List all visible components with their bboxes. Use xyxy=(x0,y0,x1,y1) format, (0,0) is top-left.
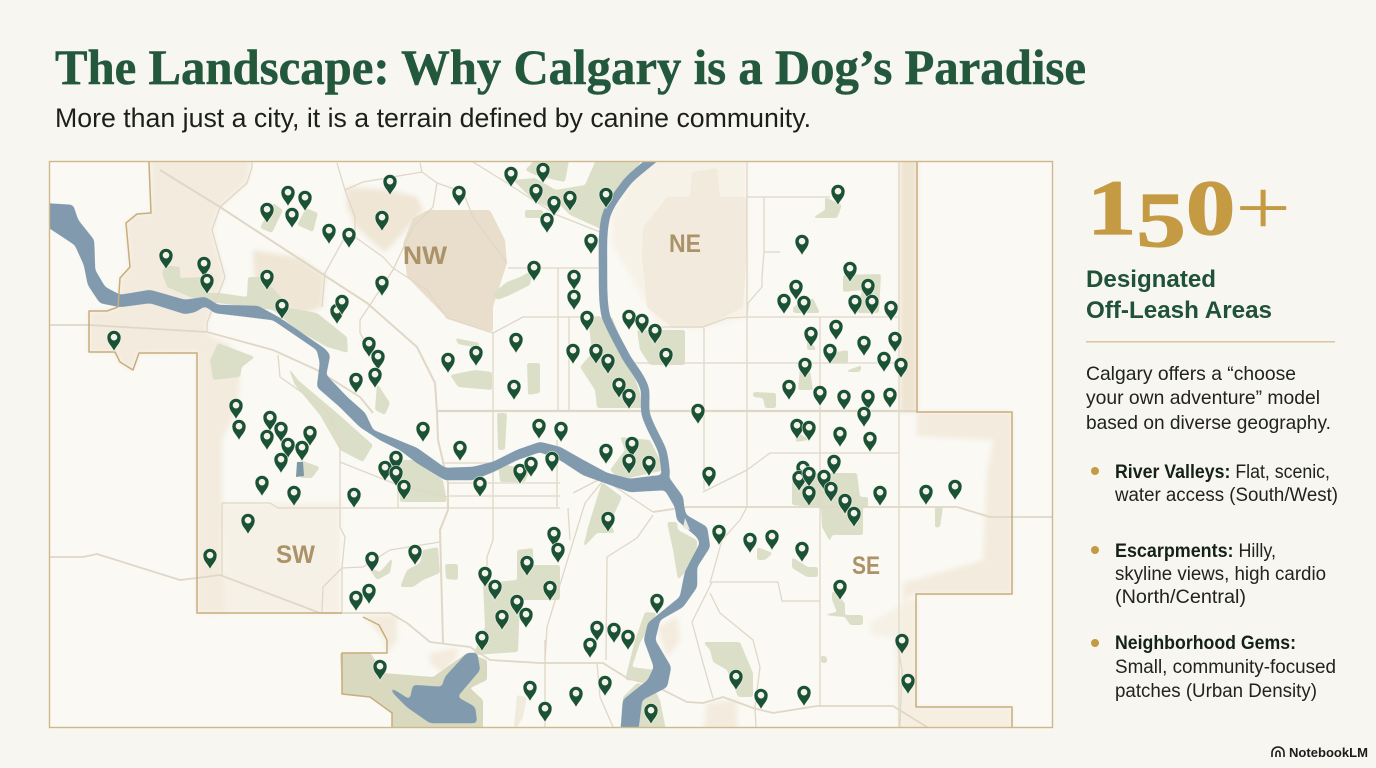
map: city boundary xyxy=(89,162,1012,727)
quadrant label: SE: SE xyxy=(852,552,880,580)
panel: map of Calgary xyxy=(40,152,1052,740)
bullet: Escarpments: Escarpments: Hilly, xyxy=(1115,541,1276,562)
bullet: Escarpments xyxy=(1091,541,1326,608)
map: tan terrain areas xyxy=(89,155,1012,735)
stat label: Off-Leash Areas xyxy=(1086,297,1272,324)
logo: NotebookLM: NotebookLM xyxy=(1289,745,1368,760)
intro text block: Calgary offers a “choose xyxy=(1086,363,1296,385)
subtitle: More than just a city, it is a terrain defined by canine community. xyxy=(55,103,811,133)
bullet: Neighborhood Gems: Neighborhood Gems: xyxy=(1115,633,1296,654)
stat: 150+: 5 xyxy=(1136,176,1186,263)
bullet: River Valleys xyxy=(1091,462,1338,506)
quadrant label: NW: NW xyxy=(403,242,447,270)
quadrant label: NE: NE xyxy=(669,230,701,258)
stat label xyxy=(1086,266,1272,324)
bullet: Escarpments: skyline views, high cardio xyxy=(1115,564,1326,585)
icon: NotebookLM mark xyxy=(1272,747,1284,757)
map: small pond and river island xyxy=(296,462,690,530)
stat: 150+: + xyxy=(1235,164,1291,251)
intro text block xyxy=(1086,363,1331,434)
intro text block: your own adventure” model xyxy=(1086,387,1320,409)
bullet: River Valleys: water access (South/West) xyxy=(1114,485,1338,506)
stat: 150+: 0 xyxy=(1186,164,1235,251)
intro text block: based on diverse geography. xyxy=(1086,412,1331,434)
stat: 150+: 1 xyxy=(1087,164,1126,251)
map: road network xyxy=(50,162,1052,727)
bullet: Escarpments: (North/Central) xyxy=(1115,587,1246,608)
map: off-leash area pins xyxy=(107,162,962,724)
bullet: Neighborhood Gems xyxy=(1091,633,1336,702)
map: Bow and Elbow rivers xyxy=(40,152,710,740)
title: The Landscape: Why Calgary is a Dog’s Paradise xyxy=(55,39,1086,95)
bullet: Neighborhood Gems: Small, community-focused xyxy=(1115,657,1336,678)
bullet: Neighborhood Gems: patches (Urban Density) xyxy=(1115,681,1317,702)
map: NW and NE tan zones xyxy=(403,168,747,332)
map: green park areas xyxy=(162,155,943,735)
bullet: River Valleys: River Valleys: Flat, scenic, xyxy=(1115,462,1330,483)
stat label: Designated xyxy=(1086,266,1216,293)
quadrant label: SW: SW xyxy=(276,541,315,569)
